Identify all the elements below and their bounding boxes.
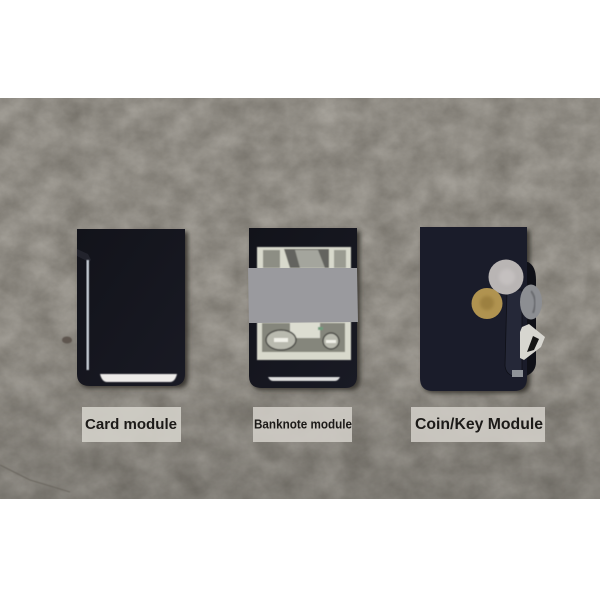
pocket flap (505, 290, 522, 376)
concrete background panel (0, 98, 600, 499)
card visible at the bottom (100, 374, 177, 382)
panel: card module wallet (77, 229, 188, 388)
banknote (257, 247, 351, 360)
side pocket (515, 262, 536, 376)
label: banknote module (253, 407, 352, 442)
icon: grey coin (520, 284, 542, 320)
icon: silver coin (488, 260, 524, 294)
label: banknote module: Banknote module (254, 418, 352, 432)
label: card module: Card module (85, 417, 177, 433)
label: coin/key module: Coin/Key Module (415, 416, 543, 433)
panel: coin and key module wallet (420, 227, 545, 393)
icon: gold coin (472, 288, 502, 319)
label: card module (82, 407, 181, 442)
card visible at the bottom (268, 377, 340, 381)
panel: banknote module wallet (248, 228, 360, 390)
elastic band (248, 268, 358, 323)
icon: key (520, 324, 545, 360)
card edge on the left (86, 260, 89, 370)
label: coin/key module (411, 407, 545, 442)
